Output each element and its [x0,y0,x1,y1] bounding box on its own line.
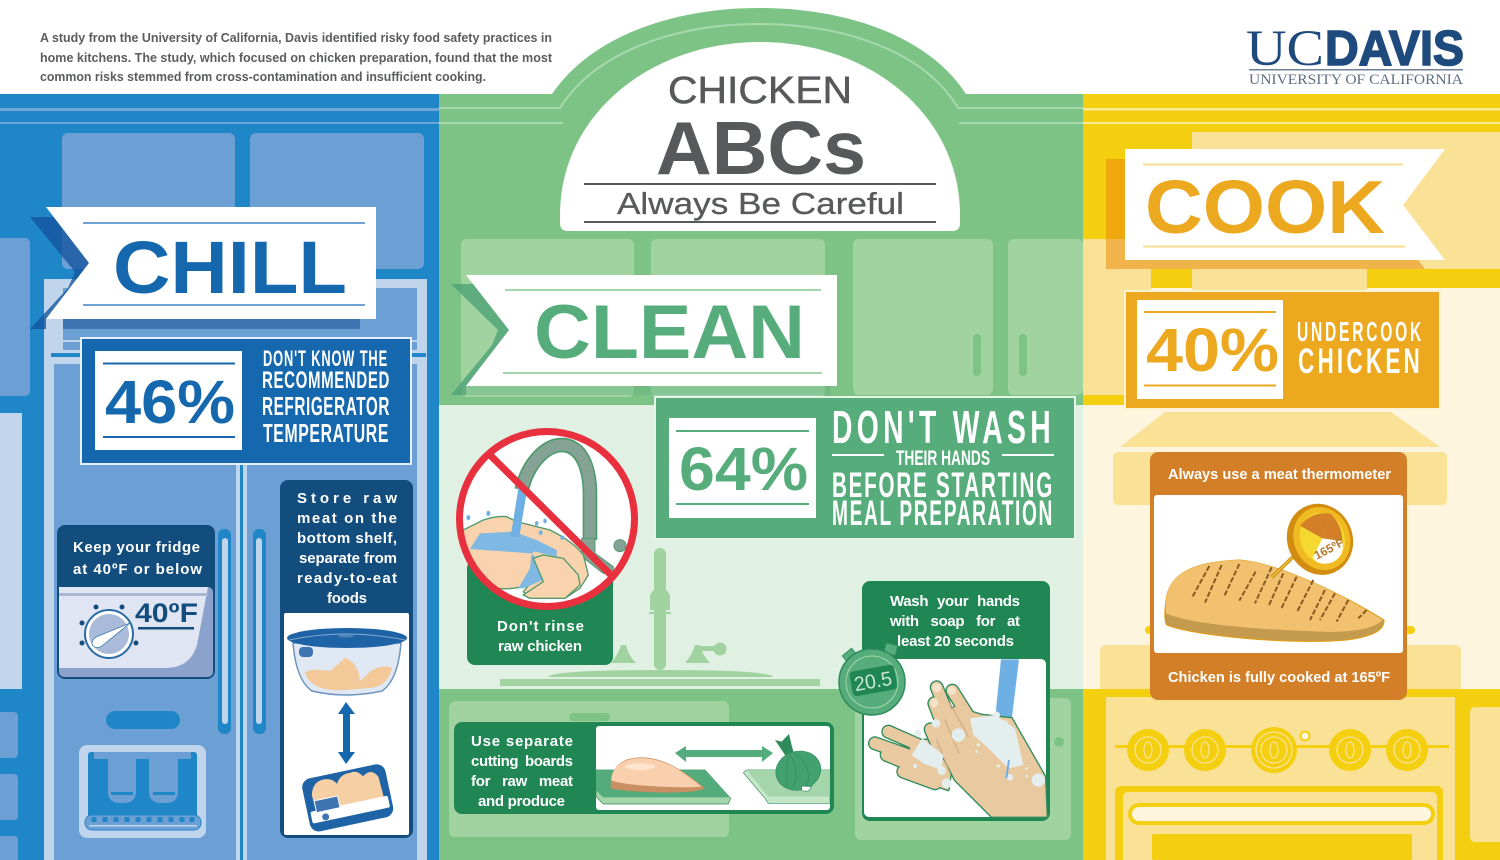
banner: chill: CHILL [113,226,347,309]
stat: 46%: DON'T KNOW THE [263,346,388,371]
title dome: CHICKEN [668,70,852,112]
icon: meat tray [301,763,395,833]
logo: UC Davis: UC [1246,21,1324,77]
stat: 40% [1125,291,1440,409]
icon: grilled chicken with thermometer [1165,494,1384,641]
icon: stopwatch: 20.5 [853,668,894,696]
intro text [40,31,553,84]
callout: separate cutting boards: for raw meat [471,773,573,790]
stat: 64%: 64% [679,435,808,503]
sink [500,548,820,686]
callout: keep fridge at 40F: at 40ºF or below [73,561,202,578]
fridge [44,279,427,860]
icon: no rinsing sign [459,431,635,607]
stat: 46%: RECOMMENDED [262,367,390,394]
icon: ice dispenser [79,745,206,838]
callout: wash your hands: Wash your hands [890,593,1020,610]
callout: wash your hands [839,581,1050,821]
intro text: common risks stemmed from cross-contamination and insufficient cooking. [40,70,486,84]
front hand [931,687,1047,817]
arrow: horizontal separation [675,746,773,762]
callout: store raw meat: Store raw [297,490,397,507]
callout: store raw meat: ready-to-eat [297,570,397,587]
banner: cook [1106,149,1445,269]
stat: 64%: THEIR HANDS [896,447,990,470]
callout: store raw meat: separate from [299,550,397,567]
callout: separate cutting boards: Use separate [471,733,573,750]
stat: 40%: 40% [1146,316,1279,384]
stat: 46%: TEMPERATURE [263,420,389,448]
callout: separate cutting boards [454,722,834,814]
callout: don't rinse raw chicken: Don't rinse [497,618,584,635]
stat: 40%: CHICKEN [1298,342,1423,381]
banner: clean: CLEAN [534,290,805,375]
panel: clean kitchen background [439,8,1083,860]
icon: thermostat dial: 40ºF [135,598,198,628]
title dome: ABCs [656,106,866,190]
banner: cook: COOK [1145,165,1385,249]
callout: store raw meat: bottom shelf, [297,530,397,547]
title dome: Always Be Careful [617,186,904,221]
callout: store raw meat: foods [327,590,367,607]
stat: 64% [655,397,1075,539]
intro text: home kitchens. The study, which focused on chicken preparation, found that the most [40,51,553,65]
stat: 64%: DON'T WASH [832,401,1055,453]
arrow: vertical separation [338,702,355,764]
icon: container with chicken [287,628,407,695]
callout: wash your hands: with soap for at [889,613,1020,630]
callout: wash your hands: least 20 seconds [897,633,1014,650]
logo: UC Davis [1246,21,1464,88]
callout: separate cutting boards: cutting boards [471,753,573,770]
title dome [560,42,960,231]
stat: 46% [81,338,411,464]
stat: 64%: BEFORE STARTING [832,466,1054,505]
panel: cook kitchen background [1083,94,1500,860]
callout: store raw meat [280,480,413,838]
callout: use a meat thermometer [1150,452,1407,700]
banner: chill [30,207,376,329]
banner: clean [451,275,837,395]
logo: UC Davis: UNIVERSITY OF CALIFORNIA [1249,72,1463,88]
icon: cutting boards, chicken, onion [596,734,830,804]
callout: separate cutting boards: and produce [478,793,565,810]
icon: stopwatch [839,643,905,715]
icon: washing hands [875,659,1047,817]
stat: 46%: 46% [105,368,235,436]
panel: chill kitchen background [0,94,439,860]
stat: 64%: MEAL PREPARATION [832,494,1054,533]
stat: 46%: REFRIGERATOR [262,393,390,421]
callout: don't rinse raw chicken: raw chicken [498,638,582,655]
intro text: A study from the University of California, Davis identified risky food safety practices in [40,31,552,45]
callout: use a meat thermometer: Chicken is fully cooked at 165ºF [1168,669,1390,686]
back hand [875,732,952,790]
callout: keep fridge at 40F [57,525,215,679]
stove: knobs and oven [1115,727,1449,860]
icon: grilled chicken with thermometer: 165ºF [1312,535,1346,563]
callout: store raw meat: meat on the [297,510,397,527]
callout: don't rinse raw chicken [459,431,635,665]
callout: keep fridge at 40F: Keep your fridge [73,539,200,556]
icon: thermostat dial [59,587,213,677]
logo: UC Davis: DAVIS [1325,22,1464,76]
callout: use a meat thermometer: Always use a meat thermometer [1168,466,1391,483]
